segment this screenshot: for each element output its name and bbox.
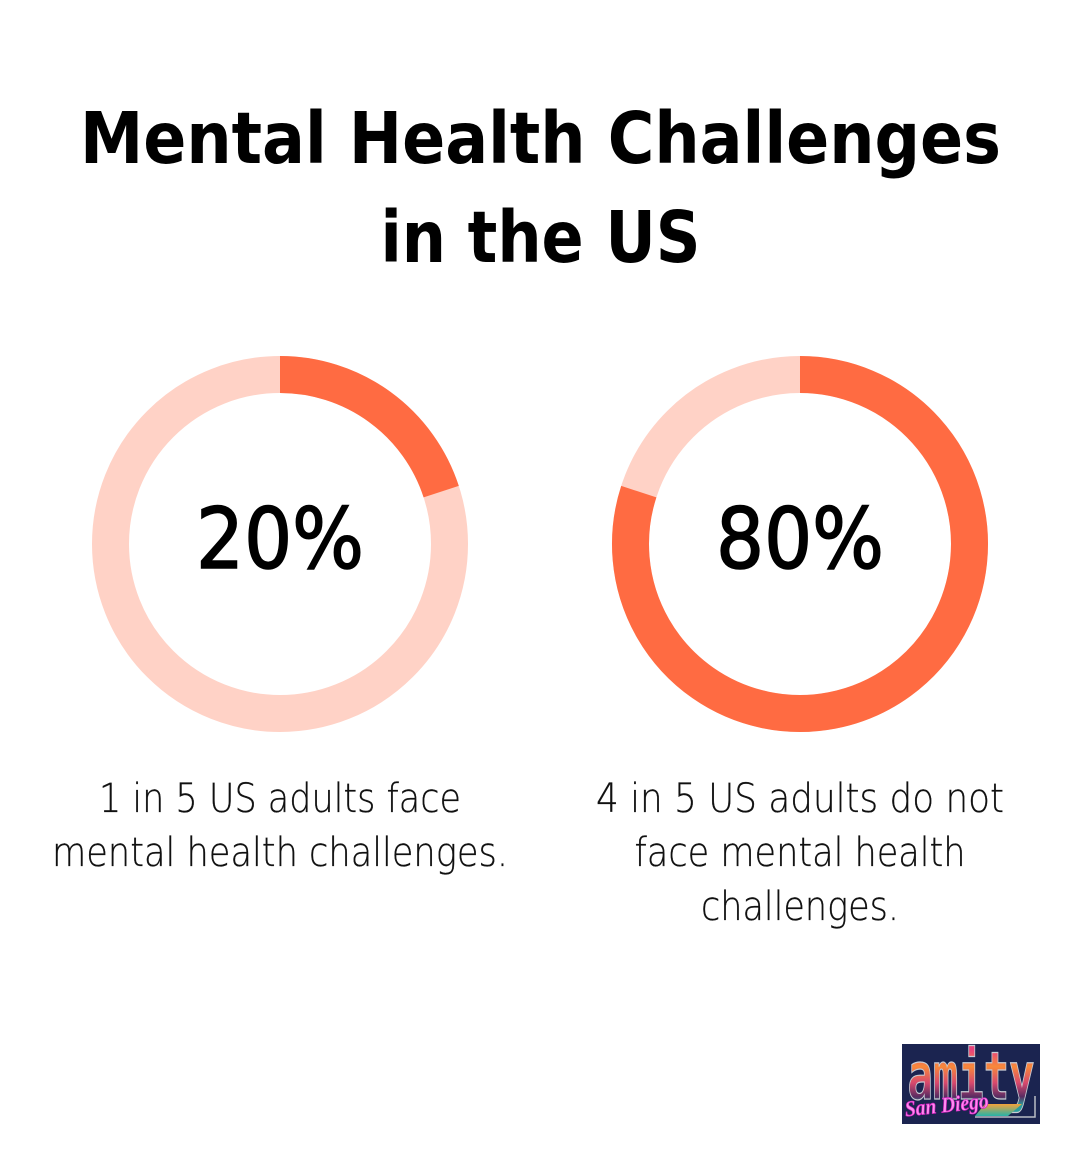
- title: in the US: [380, 196, 700, 279]
- caption: 1 in 5 face challenges: mental health challenges.: [52, 830, 508, 876]
- caption: 1 in 5 face challenges: 1 in 5 US adults face: [99, 776, 461, 822]
- panel: 80% statistic: [596, 374, 1004, 930]
- caption: 1 in 5 face challenges: [52, 776, 508, 876]
- panel: 20% statistic: [52, 374, 508, 876]
- logo: Amity San Diego: [902, 1038, 1040, 1124]
- caption: 4 in 5 do not face challenges: 4 in 5 US adults do not: [596, 776, 1004, 822]
- donut chart: 20%: [110, 374, 450, 714]
- title: Mental Health Challenges: [80, 97, 1001, 180]
- donut chart: 80%: [630, 374, 970, 714]
- caption: 4 in 5 do not face challenges: face mental health: [634, 830, 966, 876]
- logo frame and water: [975, 1096, 1035, 1117]
- value: 80%: 80%: [716, 490, 884, 588]
- title: [80, 97, 1001, 279]
- value: 20%: 20%: [196, 490, 364, 588]
- caption: 4 in 5 do not face challenges: [596, 776, 1004, 930]
- logo script: San Diego: [904, 1088, 990, 1121]
- caption: 4 in 5 do not face challenges: challenges.: [701, 884, 899, 930]
